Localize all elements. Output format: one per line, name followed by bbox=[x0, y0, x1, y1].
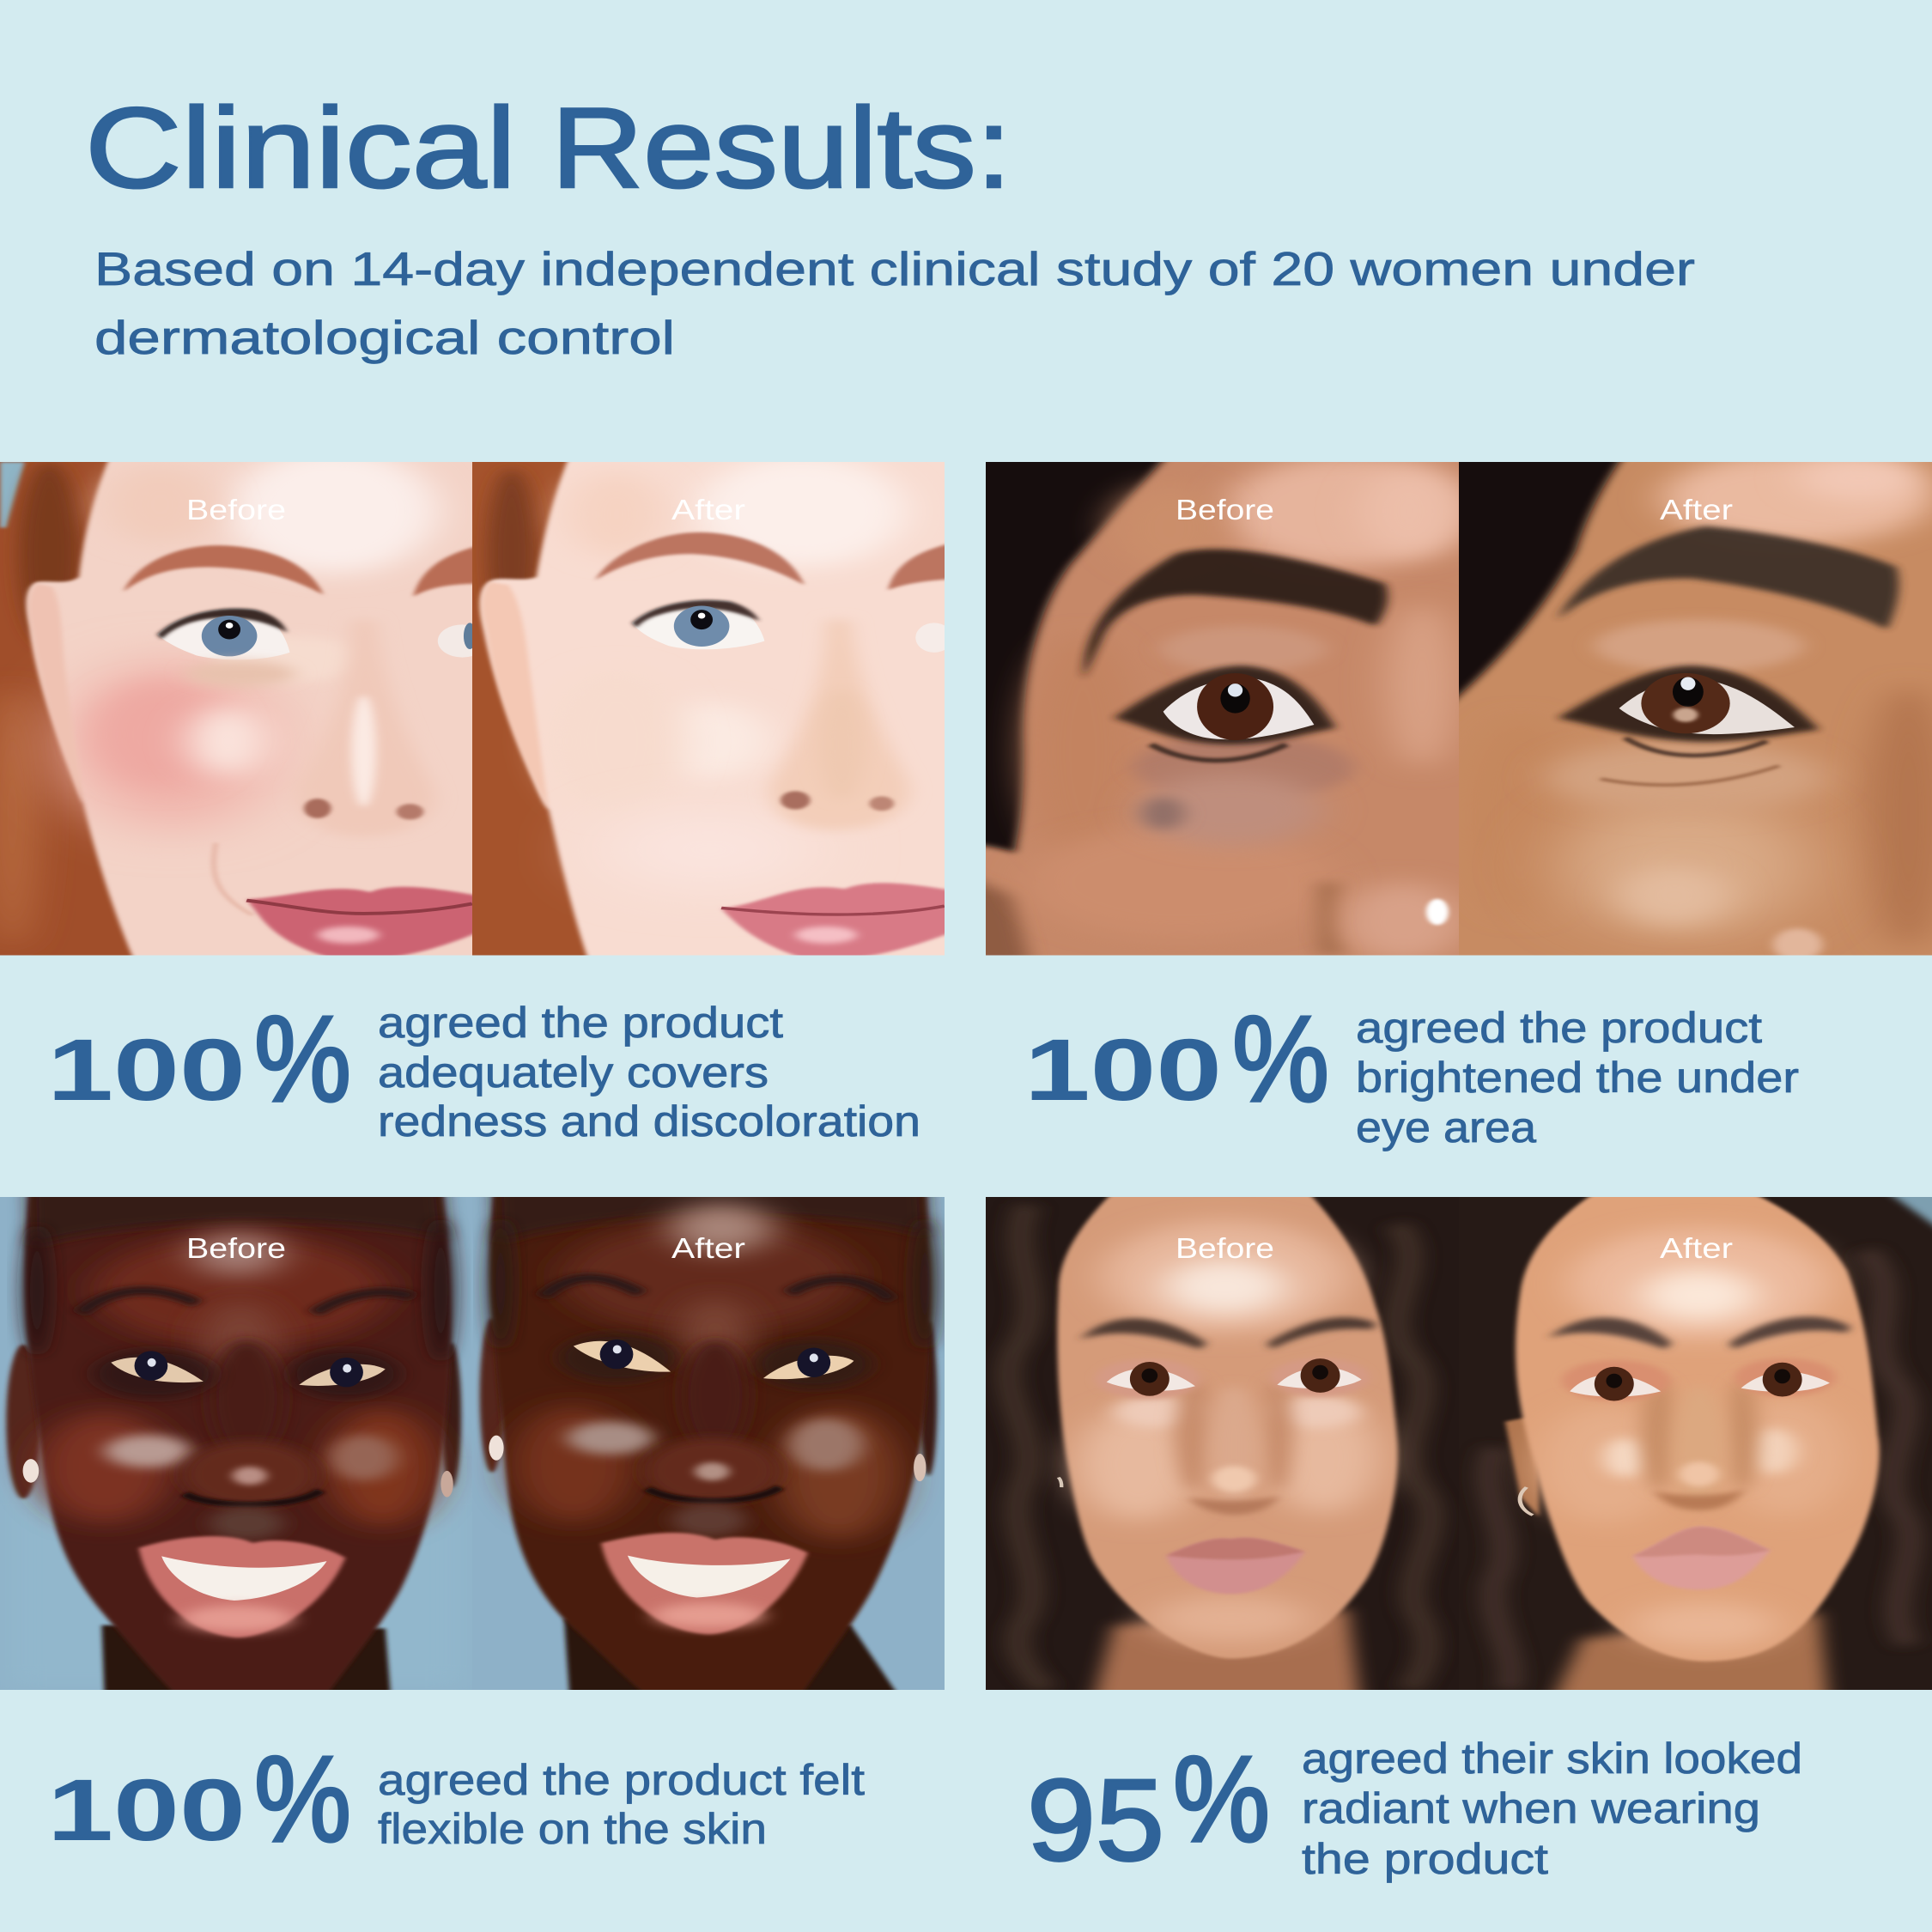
stat: radiance bbox=[1027, 1731, 1802, 1885]
subtitle bbox=[94, 242, 1695, 364]
title: Clinical bbox=[85, 85, 516, 212]
photo: redness before bbox=[0, 462, 472, 955]
description: the product bbox=[1302, 1835, 1548, 1883]
photo: flexible before bbox=[0, 1197, 472, 1690]
panel: radiance before and after bbox=[986, 1182, 1932, 1704]
photo: under eye after bbox=[1459, 462, 1932, 955]
panel: redness before and after bbox=[0, 446, 981, 971]
label: before: Before bbox=[1176, 1232, 1274, 1264]
description: adequately covers bbox=[378, 1048, 769, 1097]
description bbox=[378, 1756, 865, 1853]
photo: radiance after bbox=[1459, 1197, 1932, 1690]
panel: flexible feel before and after bbox=[0, 1182, 945, 1707]
value: 100% bbox=[47, 991, 351, 1127]
description: flexible on the skin bbox=[378, 1805, 767, 1853]
label: before: Before bbox=[186, 494, 286, 526]
description: brightened the under bbox=[1356, 1054, 1799, 1102]
description: radiant when wearing bbox=[1302, 1784, 1760, 1832]
description bbox=[1356, 1004, 1799, 1151]
label: after: After bbox=[1660, 494, 1733, 526]
value: 100%: % bbox=[1232, 991, 1329, 1127]
value: 95%: 95 bbox=[1027, 1755, 1164, 1885]
description bbox=[1302, 1735, 1802, 1883]
value: 100%: 100 bbox=[1024, 1021, 1222, 1119]
title bbox=[85, 85, 1012, 212]
stat: flexible feel bbox=[47, 1731, 865, 1868]
value: 100% bbox=[47, 1731, 351, 1868]
label: before: Before bbox=[186, 1232, 286, 1264]
photo: radiance before bbox=[986, 1197, 1459, 1690]
value: 100%: % bbox=[254, 991, 351, 1127]
subtitle: Based on 14-day independent clinical study of 20 women under bbox=[94, 242, 1695, 295]
label: after: After bbox=[671, 1232, 745, 1264]
value: 100%: % bbox=[254, 1731, 351, 1868]
photo: flexible after bbox=[472, 1197, 945, 1690]
description bbox=[378, 999, 920, 1145]
description: agreed their skin looked bbox=[1302, 1735, 1802, 1783]
stat: redness coverage bbox=[47, 991, 920, 1145]
value: 95% bbox=[1027, 1731, 1270, 1885]
description: redness and discoloration bbox=[378, 1097, 920, 1145]
label: after: After bbox=[671, 494, 745, 526]
value: 100%: 100 bbox=[47, 1761, 246, 1859]
label: after: After bbox=[1660, 1232, 1733, 1264]
subtitle: dermatological control bbox=[94, 311, 675, 364]
value: 95%: % bbox=[1173, 1731, 1270, 1868]
title: Results: bbox=[551, 85, 1012, 212]
value: 100%: 100 bbox=[47, 1021, 246, 1119]
description: eye area bbox=[1356, 1103, 1536, 1151]
photo: under eye before bbox=[986, 462, 1459, 955]
stat: under eye brightening bbox=[1024, 991, 1799, 1151]
label: before: Before bbox=[1176, 494, 1274, 526]
description: agreed the product felt bbox=[378, 1756, 865, 1804]
description: agreed the product bbox=[378, 999, 783, 1047]
value: 100% bbox=[1024, 991, 1329, 1127]
panel: under eye before and after bbox=[966, 449, 1932, 964]
description: agreed the product bbox=[1356, 1004, 1762, 1052]
photo: redness after bbox=[472, 462, 945, 955]
